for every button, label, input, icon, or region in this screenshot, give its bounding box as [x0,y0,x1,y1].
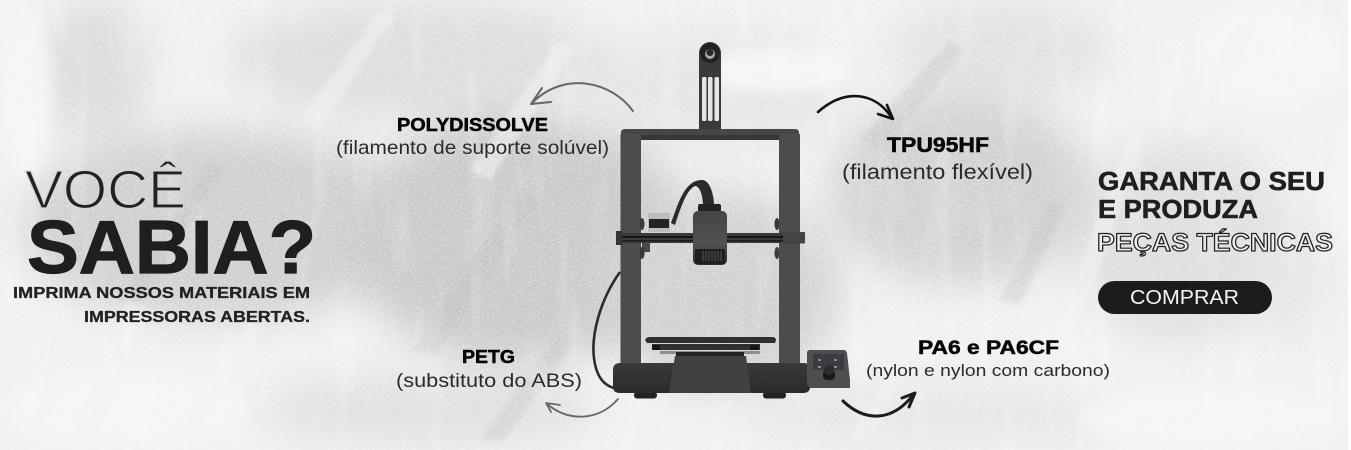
camera mount with slots [699,42,721,130]
subheading: IMPRESSORAS ABERTAS. [84,309,310,326]
outlined text: PEÇAS TÉCNICAS: PEÇAS TÉCNICAS [1097,228,1333,257]
label: TPU95HF [842,134,1033,184]
label: PA6 e PA6CF: (nylon e nylon com carbono) [866,361,1110,380]
headline: Você sabia? [13,160,316,326]
ribbon cable [671,180,714,225]
button: COMPRAR: COMPRAR [1130,287,1239,309]
subheading [13,285,310,326]
label: POLYDISSOLVE: POLYDISSOLVE [397,115,548,135]
call to action text: GARANTA O SEU [1098,166,1325,196]
gantry rail [616,218,805,259]
call to action text [1097,166,1333,257]
label: POLYDISSOLVE [336,115,609,159]
arrow: to PETG [546,399,618,417]
label: TPU95HF: TPU95HF [887,134,989,157]
arrow: to POLYDISSOLVE [531,83,633,111]
control panel with knob [807,350,850,388]
label: PETG: (substituto do ABS) [396,371,582,392]
filament cable [593,272,620,388]
call to action text: E PRODUZA [1098,194,1258,224]
3D printer [593,42,850,398]
label: TPU95HF: (filamento flexível) [842,161,1033,184]
label: PA6 e PA6CF: PA6 e PA6CF [918,338,1059,359]
arrow: to TPU95HF [818,96,893,119]
heading line: VOCÊ: VOCÊ [25,160,186,220]
button: COMPRAR [1098,281,1272,314]
bed [645,337,776,356]
arrow: to PA6 e PA6CF [843,393,915,416]
stepper motor [648,213,670,232]
print head [693,204,727,265]
frame [620,129,800,366]
label: PETG: PETG [462,347,515,367]
label: POLYDISSOLVE: (filamento de suporte solúvel) [336,137,609,159]
subheading: IMPRIMA NOSSOS MATERIAIS EM [13,285,310,302]
label: PA6 e PA6CF [866,338,1110,380]
heading line: SABIA?: SABIA? [27,205,316,289]
label: PETG [396,347,582,392]
base [613,356,810,398]
